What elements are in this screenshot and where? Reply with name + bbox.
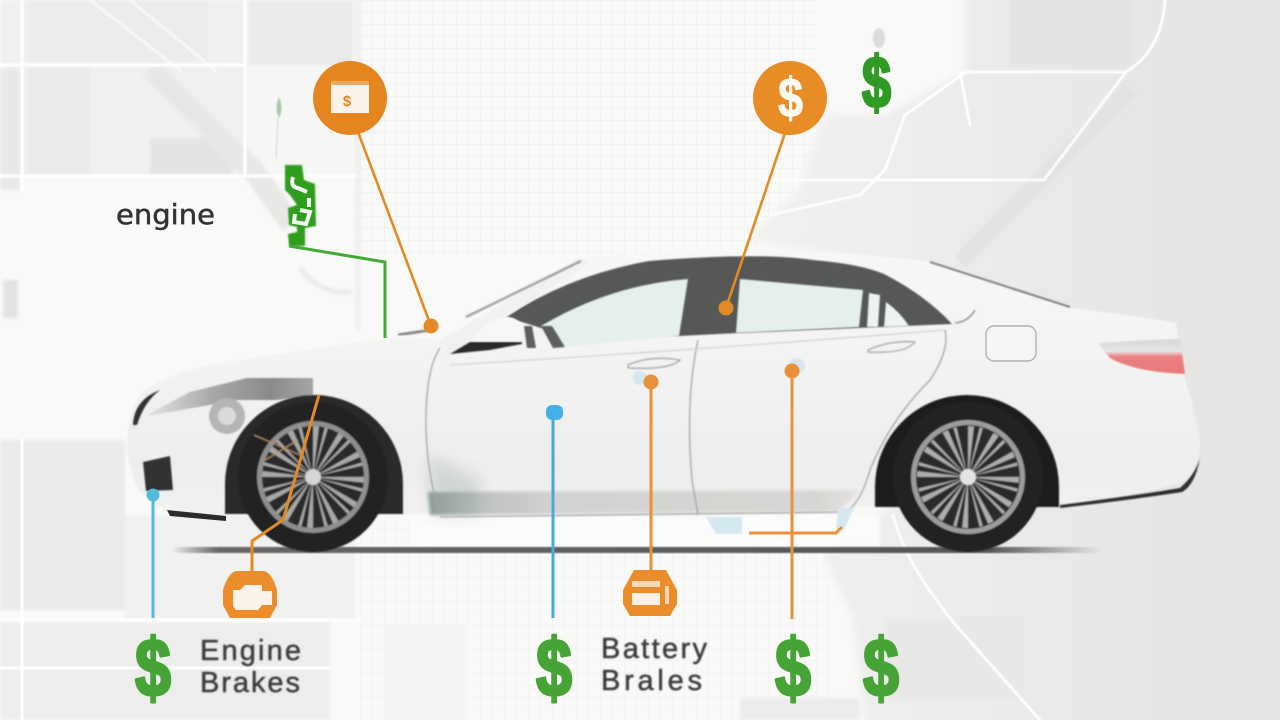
icon: engine: [223, 571, 277, 618]
wiper: [398, 330, 430, 335]
green dollar: top: $: [862, 43, 891, 123]
rear wheel arch: [875, 395, 1059, 507]
green dollar: third: $: [775, 623, 811, 714]
rear wheel: [893, 402, 1043, 552]
icon: invoice: $: [343, 93, 352, 110]
front wheel arch: [225, 395, 403, 514]
window frame: [506, 256, 952, 336]
green dollar: fourth: $: [863, 623, 899, 714]
front vent: [143, 456, 173, 491]
lower sill: [428, 490, 860, 515]
green dollar: engine brakes: $: [135, 623, 171, 714]
blue line: door: [546, 405, 563, 618]
rear window: [736, 279, 863, 333]
orange callout: top left: [313, 61, 438, 334]
rear bumper shadow: [1060, 458, 1200, 508]
engine label: engine: [116, 198, 215, 231]
orange line: battery: [644, 374, 658, 572]
front wheel: [238, 402, 388, 552]
windshield pillar: [439, 258, 590, 354]
car: [127, 251, 1200, 552]
icon: white dollar: $: [778, 66, 803, 129]
ground shadow: [172, 547, 1102, 553]
rear deck line: [930, 262, 1070, 307]
tail light: [1098, 339, 1185, 374]
front window: [541, 279, 688, 347]
orange callout: top right: [718, 61, 827, 316]
sill shade at front door: [428, 455, 480, 515]
label: battery brales: Battery: [601, 633, 708, 665]
orange line: rear door: [784, 364, 800, 619]
side mirror: [450, 317, 565, 354]
door lines: [426, 310, 975, 517]
icon: battery: [623, 570, 677, 616]
green dollar: top: [862, 28, 891, 123]
label: battery brales: Brales: [601, 665, 702, 697]
small green leaf marker: [276, 97, 282, 158]
front lip: [167, 510, 226, 521]
icon: invoice: [331, 81, 369, 113]
orange underbody line: [749, 527, 842, 533]
label: engine brakes: Engine: [200, 635, 301, 667]
label: engine brakes: Brakes: [200, 667, 300, 699]
engine connector: [252, 395, 319, 572]
green connector: [285, 165, 385, 338]
light blue underbody marks: [633, 358, 854, 534]
blue line: bumper: [146, 488, 160, 618]
rear quarter glass: [867, 293, 909, 327]
fuel door: [986, 326, 1036, 361]
car body: [127, 251, 1200, 518]
green dollar: battery: $: [536, 623, 572, 714]
headlight: [133, 378, 313, 434]
